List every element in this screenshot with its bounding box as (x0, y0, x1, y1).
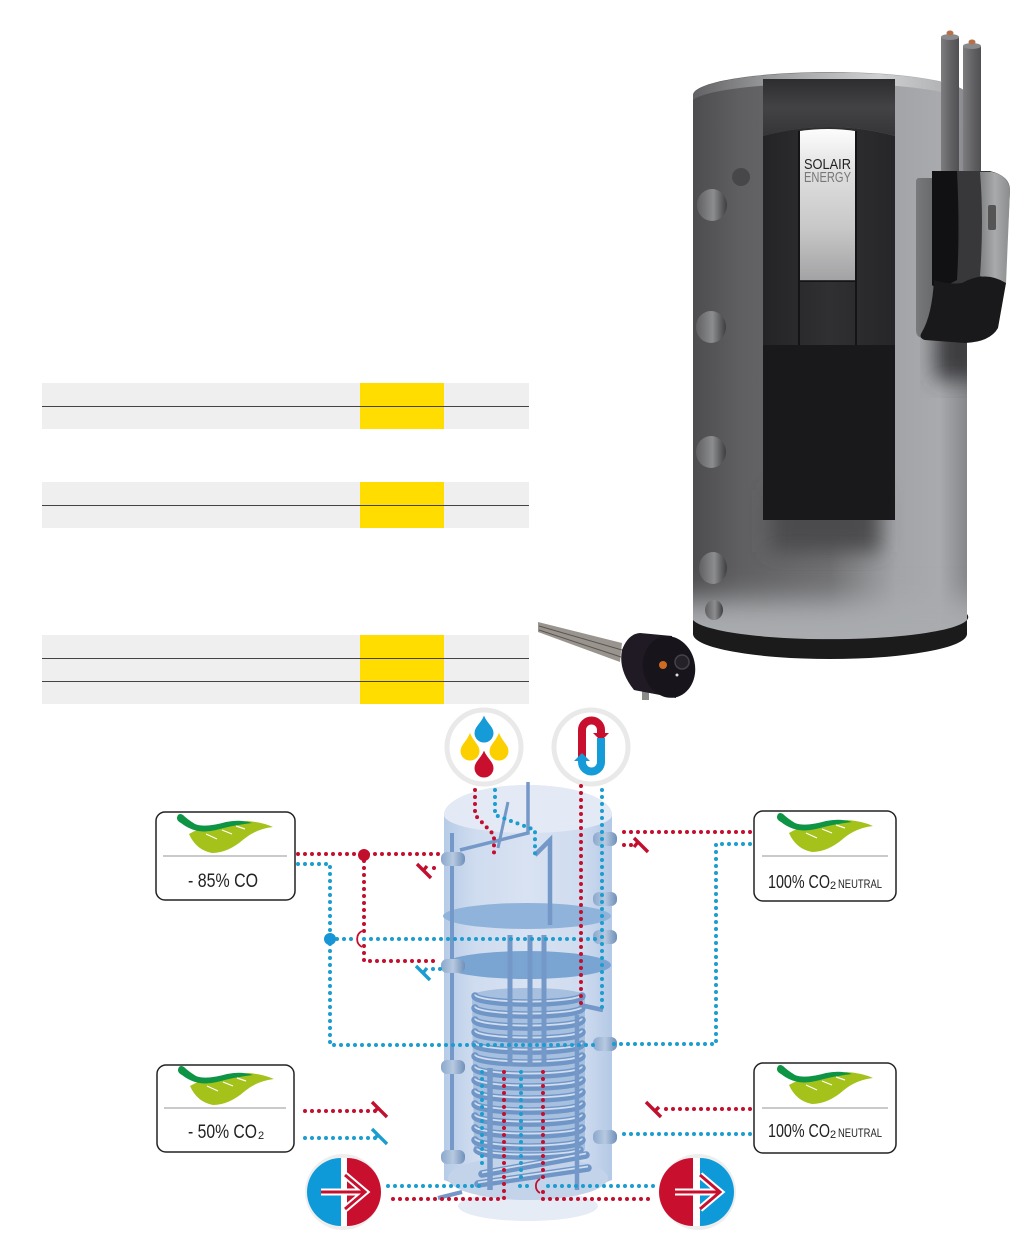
body lighting and shadows (660, 320, 1000, 680)
tank body (693, 72, 967, 649)
heater head (621, 633, 676, 698)
valve symbols (372, 838, 661, 1144)
heater rods (538, 622, 622, 662)
heat exchanger coil (475, 994, 588, 1184)
icon: left heat exchange circle (305, 1154, 381, 1230)
coil blue verticals (482, 1072, 521, 1184)
red short stub right (624, 843, 636, 847)
table row group 2 (42, 482, 529, 528)
bottom left red line (305, 1109, 376, 1113)
insulated pipes (941, 30, 981, 177)
baffle discs (443, 903, 611, 979)
label box: top right 100 percent neutral: 100% CO (768, 872, 830, 892)
heat exchanger coil backing (472, 988, 585, 1158)
right tank fittings (593, 832, 617, 1144)
icon: circulation loop (554, 710, 628, 784)
wall-mounted controller (916, 171, 1010, 343)
lower front panel (763, 345, 895, 520)
label box: bottom right 100 percent neutral (754, 1063, 896, 1153)
label box: minus 50 percent CO2: 2 (258, 1130, 264, 1142)
blue flow right (608, 844, 750, 1044)
icon: mixed water drops (447, 710, 521, 784)
valve stub left red (434, 866, 441, 870)
label box: top right 100 percent neutral (754, 811, 896, 901)
blue cross line (330, 937, 600, 941)
brand plate: SOLAIR (804, 156, 851, 173)
label box: bottom right 100 percent neutral: 2 (830, 1129, 836, 1141)
product photo: immersion heater (538, 622, 701, 703)
label box: minus 50 percent CO2: - 50% CO (188, 1122, 257, 1143)
coil red verticals (388, 1072, 655, 1199)
bottom left blue line (305, 1136, 376, 1140)
drop icon red feed (475, 790, 494, 853)
label box: top right 100 percent neutral: NEUTRAL (838, 879, 882, 891)
crossing arcs (357, 931, 540, 1193)
pipe sections in front of the tank (941, 82, 981, 177)
table row group 3 (42, 635, 529, 704)
loop icon blue feed (600, 790, 604, 1010)
tank dome (444, 785, 612, 833)
label box: top right 100 percent neutral: 2 (830, 880, 836, 892)
label box: bottom right 100 percent neutral: NEUTRAL (838, 1128, 882, 1140)
dotted pipe lines (298, 786, 750, 1199)
bottom right red line (662, 1107, 750, 1111)
internal pipes (438, 782, 603, 1198)
brand plate: ENERGY (804, 169, 851, 186)
red flow top right (621, 830, 750, 834)
front panel cap (763, 79, 895, 136)
front panel columns (763, 127, 895, 345)
label box: bottom right 100 percent neutral: 100% CO (768, 1121, 830, 1141)
junction nodes (324, 849, 370, 945)
panel seams (799, 131, 856, 345)
drop icon blue feed (495, 790, 535, 855)
label box: minus 85 percent CO (156, 812, 295, 900)
product photo: solar water tank (693, 30, 1010, 659)
tank base (458, 1191, 598, 1221)
tank lower ring (448, 1156, 608, 1200)
label box: minus 50 percent CO2 (157, 1065, 294, 1152)
icon: right heat exchange circle (659, 1154, 736, 1230)
side fittings (696, 168, 750, 620)
label box: minus 85 percent CO: - 85% CO (188, 871, 258, 892)
red flow top left (298, 852, 440, 856)
brand plate (800, 129, 855, 281)
red branch down (364, 854, 435, 961)
bottom blue line (388, 1184, 657, 1188)
valve stub left blue (433, 967, 441, 971)
tank base band (693, 614, 968, 659)
cutaway tank (438, 782, 617, 1221)
table row group 1 (42, 383, 529, 429)
bottom right blue line (618, 1132, 750, 1136)
blue flow top left (298, 864, 600, 1045)
tank shell (444, 785, 612, 1197)
loop icon red feed (579, 786, 583, 1010)
tank top rim (693, 72, 941, 100)
left tank fittings (441, 852, 465, 1164)
